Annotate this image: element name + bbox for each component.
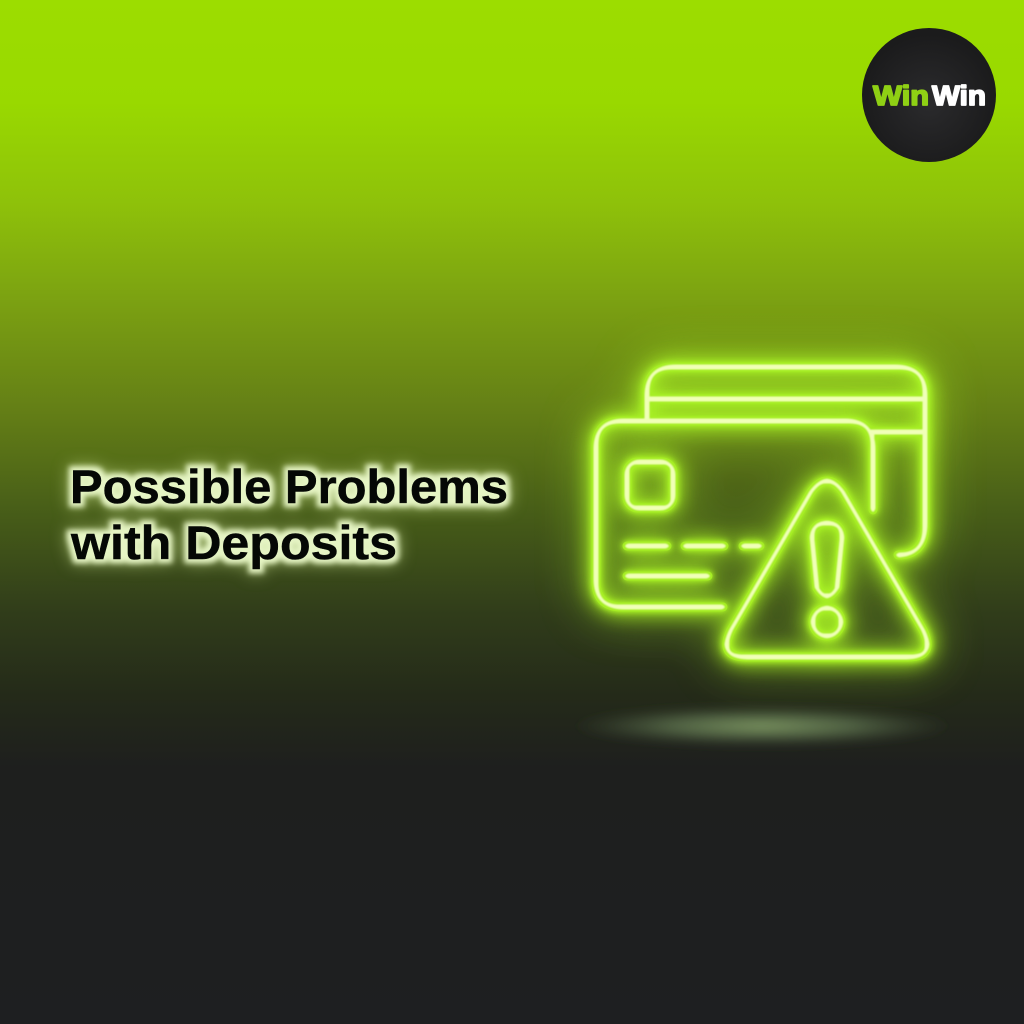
card chip	[627, 462, 673, 508]
logo wordmark: Win	[932, 80, 986, 111]
logo wordmark: Win	[873, 80, 929, 111]
title: with Deposits	[70, 516, 397, 569]
exclamation mark bar	[812, 523, 842, 596]
back card stripes	[647, 399, 925, 432]
back card outline	[647, 367, 925, 555]
card number dashes	[627, 546, 760, 576]
floor glow under icon	[572, 706, 952, 746]
front card outline	[596, 421, 873, 607]
title: Possible Problems	[70, 460, 508, 513]
warning triangle	[727, 481, 927, 657]
icon: neon credit cards with warning triangle	[596, 367, 927, 657]
logo: WinWin badge	[862, 28, 996, 162]
logo wordmark	[873, 80, 986, 111]
exclamation mark dot	[813, 608, 841, 636]
